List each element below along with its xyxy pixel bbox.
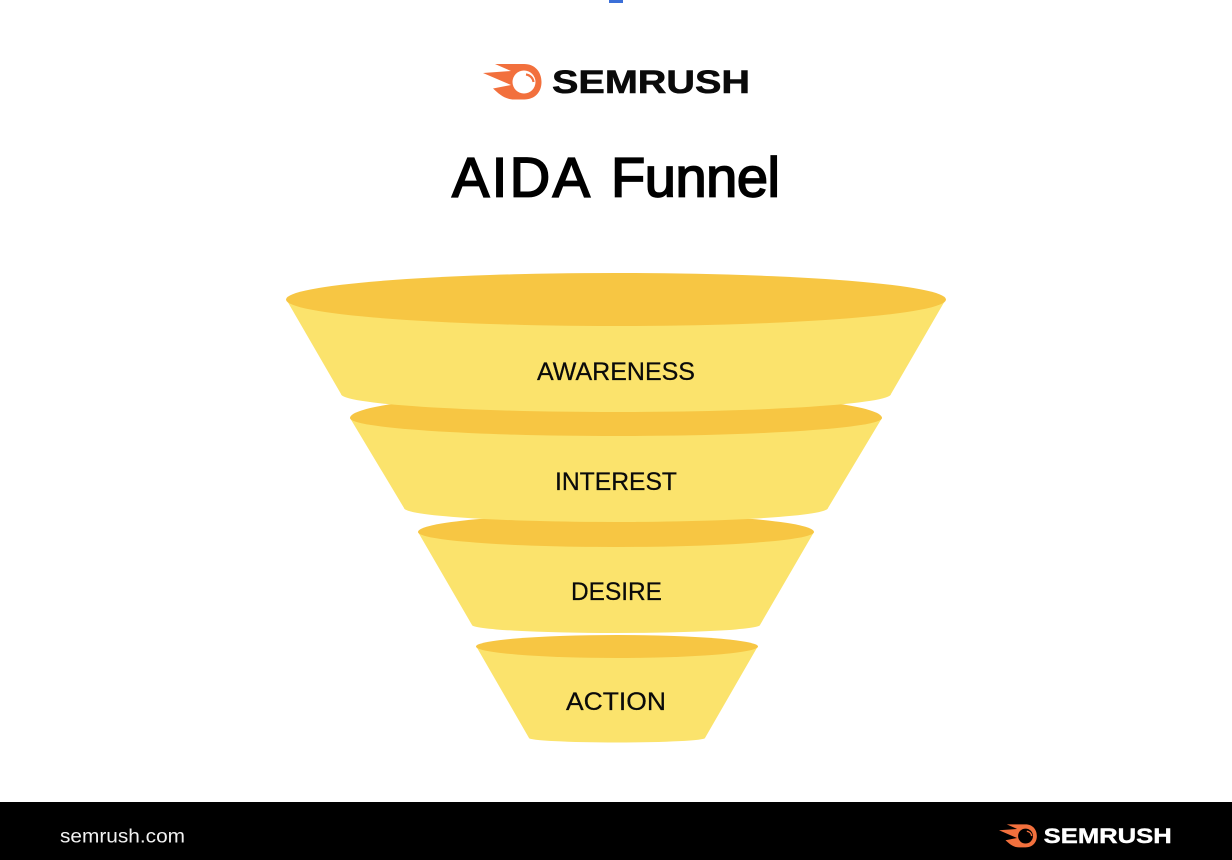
funnel tier: interest	[350, 392, 882, 522]
footer bar	[0, 802, 1232, 860]
title	[452, 146, 780, 208]
title: AIDA	[452, 146, 591, 208]
logo: Semrush footer: SEMRUSH	[1044, 825, 1172, 848]
funnel tier: action: ACTION	[566, 688, 666, 716]
funnel tier: awareness	[286, 273, 946, 412]
footer url: semrush.com	[60, 826, 185, 848]
title: Funnel	[611, 146, 780, 208]
logo wordmark: SEMRUSH	[552, 64, 750, 100]
funnel tier: interest: INTEREST	[555, 468, 677, 496]
logo: Semrush header	[483, 64, 750, 100]
funnel tier: action	[476, 635, 758, 742]
funnel tier: desire	[418, 514, 814, 633]
funnel tier: desire: DESIRE	[571, 578, 662, 606]
funnel tier: awareness: AWARENESS	[537, 358, 695, 386]
funnel chart	[286, 273, 946, 742]
logo: Semrush footer	[999, 824, 1172, 848]
icon: Semrush fireball	[483, 64, 542, 100]
